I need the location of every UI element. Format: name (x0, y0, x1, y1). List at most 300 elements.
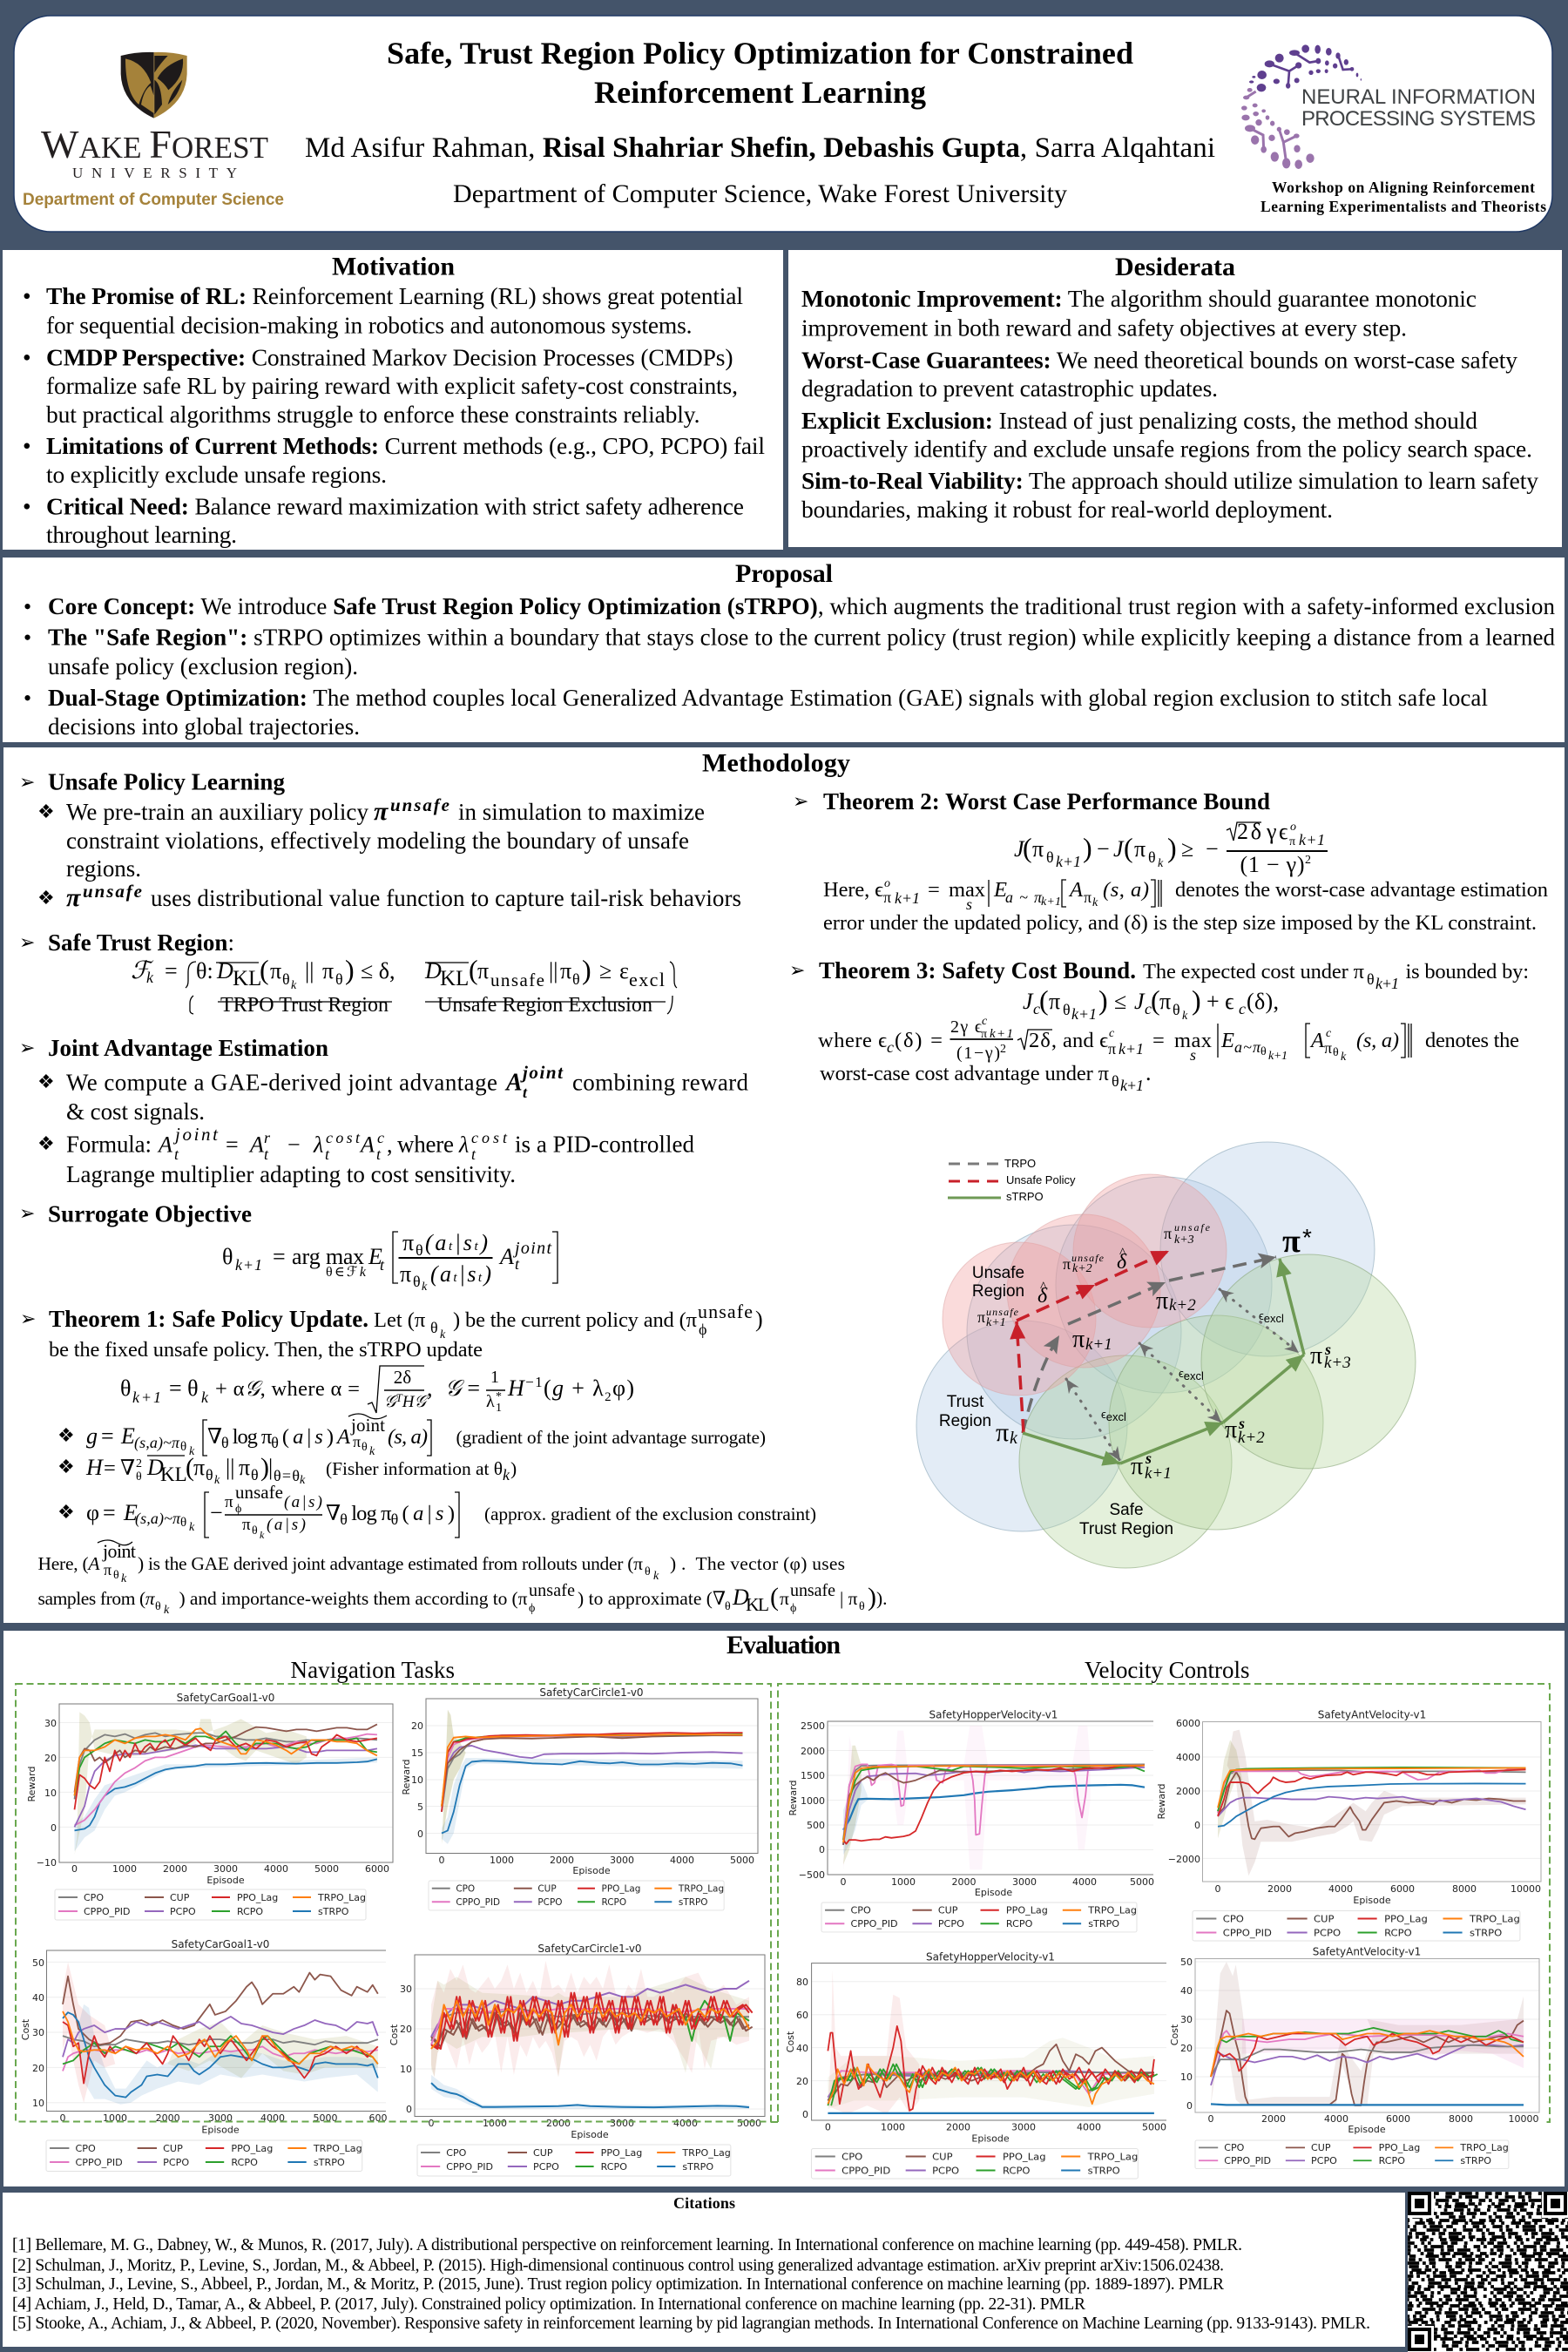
chart: SafetyAntVelocity reward: 10000 (1511, 1883, 1541, 1895)
formula: g: ❖ (57, 1425, 75, 1447)
legend: PPO_Lag (601, 2147, 642, 2159)
wordmark: WAKE FOREST (41, 122, 268, 166)
formula: feasible set: D (424, 958, 442, 983)
formula: cost bound: J (1023, 989, 1034, 1014)
text block: theorem 2 explanation: max (949, 878, 985, 902)
chart: SafetyHopperVelocity cost: 80 (796, 1977, 808, 1988)
chart: SafetyCarCircle1 reward: 0 (417, 1828, 423, 1840)
chart: SafetyAntVelocity reward: 2000 (1176, 1786, 1200, 1797)
section: theorem 3: θ (1367, 970, 1375, 988)
formula: phi: (s,a)~π (135, 1510, 181, 1528)
text block: theorem 3 explanation: a~π (1234, 1038, 1261, 1056)
text block: proposal bullets (24, 593, 1556, 740)
text block: theorem 1 explanation: k (121, 1572, 127, 1585)
section: theorem 3: The expected cost under π (1143, 960, 1364, 983)
section: joint advantage estimation: Formula: (66, 1131, 152, 1157)
formula: surrogate objective: E (368, 1244, 382, 1269)
logo: NeurIPS: PROCESSING SYSTEMS (1301, 107, 1536, 131)
formula: phi: ( (397, 1502, 414, 1525)
region labels: Region (939, 1412, 991, 1430)
reference list: [1] Bellemare, M. G., Dabney, W., & Munos, R. (2017, July). A distributional perspective on reinforcement learning. In International conference on machine learning (pp. 449-458). PMLR. (12, 2236, 1242, 2254)
formula: surrogate objective: π (402, 1230, 414, 1255)
legend: CPO (1223, 1914, 1244, 1924)
chart: SafetyHopperVelocity cost: 0 (802, 2109, 808, 2120)
text block: theorem 3 explanation: and ϵ (1063, 1029, 1108, 1052)
formula: feasible set: ( (260, 954, 269, 985)
formula: performance bound: θ (1148, 848, 1156, 866)
chart: SafetyAntVelocity reward: 4000 (1328, 1883, 1353, 1895)
formula: feasible set: ≤ δ, (361, 958, 395, 983)
chart: SafetyHopperVelocity cost: 4000 (1077, 2122, 1101, 2132)
formula: cost bound: J (1134, 989, 1146, 1014)
section: safe trust region: ➢ (19, 932, 35, 954)
chart: SafetyCarGoal1 cost: 600 (369, 2112, 387, 2124)
policy labels: k+1 (986, 1316, 1006, 1329)
text block: proposal bullets: Dual-Stage Optimization: The method couples local Generalized Advantage Estimation (GAE) signals with global region exclusion to stitch safe local (48, 685, 1488, 711)
formula: performance bound: k+1 (1056, 853, 1081, 870)
section: joint advantage estimation: r (264, 1129, 271, 1146)
chart: SafetyAntVelocity cost: Cost (1169, 2024, 1180, 2045)
text block: theorem 3 explanation: 2 (1000, 1043, 1006, 1056)
arrows: exclusion distance (1066, 1289, 1299, 1461)
chart: SafetyHopperVelocity reward: Episode (975, 1887, 1012, 1898)
text block: motivation bullets: but practical algorithms struggle to enforce these constraints reliably. (46, 401, 700, 428)
formula: surrogate objective: joint (512, 1239, 551, 1258)
formula: performance bound: o (1290, 821, 1296, 834)
legend: PCPO (932, 2166, 959, 2176)
logo: Wake Forest University (23, 52, 284, 209)
text block: theorem 1 explanation: ) and importance-weights them according to (π (179, 1588, 528, 1609)
formula: H: θ (206, 1466, 213, 1484)
text block: theorem 3 explanation: max (1174, 1029, 1212, 1052)
legend: sTRPO (1088, 2166, 1120, 2176)
formula: surrogate objective (222, 1230, 558, 1294)
text block: theorem 2 explanation: E (993, 878, 1007, 902)
text block: proposal bullets: unsafe policy (exclusion region). (48, 653, 358, 679)
heading: motivation: Motivation (332, 253, 455, 280)
section: unsafe policy learning: ➢ (19, 772, 35, 794)
formula: sTRPO update: g + λ (552, 1375, 604, 1401)
diagram legend (948, 1157, 1076, 1203)
formula: phi: k (189, 1521, 195, 1534)
formula: g: (s, a) (388, 1425, 428, 1449)
chart: SafetyAntVelocity reward: SafetyAntVelocity-v1 (1318, 1709, 1426, 1721)
text block: theorem 1 explanation: KL (746, 1594, 769, 1615)
formula: g: k (369, 1445, 375, 1458)
arrows: unsafe policy (1017, 1251, 1169, 1433)
text block: motivation bullets: to explicitly exclude unsafe regions. (46, 461, 387, 488)
policy labels: k+2 (1072, 1262, 1092, 1275)
text block: theorem 1 explanation: ) (868, 1583, 876, 1612)
legend: PPO_Lag (231, 2143, 273, 2154)
legend: CUP (1314, 1914, 1335, 1924)
formula: surrogate objective: t (380, 1256, 385, 1274)
legend: PCPO (1314, 1928, 1341, 1938)
formula: performance bound: J (1113, 836, 1125, 862)
legend: CPPO_PID (1223, 1928, 1272, 1938)
text block: theorem 3 explanation: (s, a) (1356, 1029, 1399, 1052)
chart: SafetyHopperVelocity reward: 5000 (1130, 1876, 1154, 1888)
chart: SafetyHopperVelocity cost: 1000 (881, 2122, 905, 2132)
formula: cost bound: π (1049, 989, 1060, 1014)
chart: SafetyAntVelocity cost: 8000 (1449, 2113, 1473, 2125)
text block: theorem 1 explanation: ) is the GAE derived joint advantage estimated from rollouts under (π (138, 1553, 643, 1574)
formula: H: k (300, 1474, 306, 1487)
chart: SafetyCarGoal1 cost: 10 (32, 2098, 44, 2109)
text block: theorem 2 explanation: o (884, 877, 890, 890)
text block: theorem 3 explanation: θ (1333, 1046, 1339, 1059)
chart: SafetyAntVelocity cost: SafetyAntVelocity-v1 (1313, 1946, 1421, 1958)
text block: theorem 3 explanation: E (1220, 1029, 1234, 1052)
green safe trust region circles (1019, 1254, 1416, 1568)
formula: feasible set: θ (282, 970, 290, 988)
region labels: Trust (947, 1393, 984, 1411)
legend: RCPO (602, 1897, 626, 1908)
policy labels: ^ (1119, 1246, 1126, 1260)
formula: sTRPO update: = θ (169, 1375, 199, 1401)
policy labels: π (1310, 1342, 1322, 1369)
section: joint advantage estimation: t (376, 1146, 382, 1163)
section: joint advantage estimation: t (264, 1146, 269, 1163)
formula: H: π (239, 1455, 250, 1480)
section: joint advantage estimation: ➢ (19, 1037, 35, 1059)
legend: CPPO_PID (850, 1918, 898, 1930)
legend: sTRPO (1460, 2155, 1491, 2166)
formula: g: g (86, 1423, 98, 1449)
chart: SafetyAntVelocity cost: Episode (1348, 2124, 1386, 2135)
chart: SafetyHopperVelocity reward (787, 1709, 1154, 1932)
policy labels: π (1164, 1225, 1172, 1242)
diagram: trust regions (916, 1142, 1416, 1568)
formula: phi: ❖ (57, 1502, 75, 1524)
legend: sTRPO (679, 1897, 707, 1908)
formula: feasible set: ε (619, 958, 629, 983)
formula: H: (Fisher information at θ (326, 1458, 503, 1479)
chart: SafetyCarGoal1 reward: 1000 (112, 1863, 137, 1875)
policy labels: k+2 (1238, 1429, 1265, 1447)
chart: SafetyAntVelocity reward: 6000 (1176, 1718, 1200, 1729)
formula: H: ∇ (120, 1456, 135, 1480)
section: theorem 1: ϕ (699, 1321, 706, 1338)
legend: RCPO (231, 2157, 258, 2168)
formula: performance bound: ( (1023, 832, 1032, 863)
formula: cost bound: c (1239, 1000, 1246, 1017)
section: surrogate objective: ➢ (19, 1203, 35, 1225)
formula: sTRPO update: H (507, 1375, 525, 1401)
formula: H: k (214, 1474, 220, 1487)
legend: CPPO_PID (446, 2161, 493, 2173)
text block: theorem 1 explanation: unsafe (529, 1581, 575, 1600)
formula: surrogate objective: = (273, 1244, 286, 1269)
legend: PCPO (170, 1906, 196, 1917)
formula: surrogate objective: k (422, 1281, 428, 1294)
chart: SafetyCarCircle1 reward: 20 (411, 1720, 423, 1732)
title: Reinforcement Learning (594, 75, 926, 110)
text block: theorem 3 explanation: where ϵ (818, 1029, 887, 1052)
text block: desiderata items: improvement in both reward and safety objectives at every step. (801, 314, 1407, 341)
formula: g: π (353, 1433, 361, 1450)
text block: motivation bullets: Limitations of Current Methods: Current methods (e.g., CPO, PCPO) fail (46, 432, 765, 459)
chart: SafetyAntVelocity reward: Episode (1353, 1895, 1391, 1906)
section: theorem 3: is bounded by: (1406, 960, 1529, 983)
section: joint advantage estimation: is a PID-controlled (515, 1131, 695, 1157)
formula: g: ∇ (207, 1425, 222, 1449)
chart: SafetyAntVelocity reward: Reward (1156, 1784, 1167, 1819)
chart: SafetyHopperVelocity reward: 1000 (891, 1876, 916, 1888)
legend: RCPO (601, 2161, 627, 2173)
formula: g: = (101, 1423, 114, 1449)
formula: g (57, 1414, 766, 1458)
legend: CPPO_PID (456, 1897, 500, 1908)
text block: motivation bullets: • (23, 343, 31, 371)
formula: g: (s,a)~π (134, 1434, 180, 1452)
formula: H: | (268, 1455, 273, 1480)
policy labels: k+1 (1085, 1335, 1112, 1354)
legend: PPO_Lag (1003, 2152, 1046, 2162)
region labels: Region (972, 1282, 1024, 1301)
formula: cost bound: ≤ (1114, 989, 1126, 1014)
panel: methodology (3, 747, 1565, 1623)
chart: SafetyHopperVelocity reward: 4000 (1072, 1876, 1097, 1888)
text block: theorem 3 explanation: 2δ, (1029, 1029, 1057, 1052)
text block: desiderata items: proactively identify and exclude unsafe regions from the policy search space. (801, 436, 1532, 462)
text block: proposal bullets: • (24, 625, 31, 650)
text block: motivation bullets: for sequential decision-making in robotics and autonomous systems. (46, 312, 692, 338)
legend: RCPO (1384, 1928, 1412, 1938)
formula: cost bound: π (1159, 989, 1171, 1014)
chart: SafetyHopperVelocity cost: SafetyHopperVelocity-v1 (926, 1951, 1055, 1963)
section: unsafe policy learning: ❖ (37, 801, 55, 823)
legend: TRPO_Lag (1087, 2152, 1138, 2162)
section: safe trust region: Safe Trust Region: (48, 929, 234, 956)
chart: SafetyCarCircle1 cost: 0 (429, 2118, 434, 2129)
formula: phi: k (260, 1529, 265, 1541)
chart: SafetyCarCircle1 reward: Reward (401, 1760, 412, 1794)
wordmark: university: UNIVERSITY (72, 165, 237, 181)
legend: CUP (537, 1884, 557, 1895)
text block: theorem 3 explanation: k (1341, 1051, 1347, 1064)
formula: phi: unsafe (235, 1482, 283, 1503)
section: joint advantage estimation: ❖ (37, 1071, 55, 1093)
formula: H: π (193, 1455, 205, 1480)
section: joint advantage estimation: A (157, 1132, 172, 1157)
formula: performance bound: ) (1083, 832, 1092, 863)
chart: SafetyHopperVelocity cost: Episode (971, 2132, 1010, 2145)
formula: H: ) (510, 1458, 517, 1479)
heading: velocity controls: Velocity Controls (1085, 1657, 1249, 1683)
policy labels: excl (1264, 1312, 1284, 1325)
text block: theorem 2 explanation: A (1068, 878, 1084, 902)
text block: theorem 3 explanation: c (1109, 1027, 1115, 1040)
chart: SafetyHopperVelocity reward: 0 (840, 1876, 847, 1888)
title (387, 36, 1133, 110)
legend: CUP (1311, 2143, 1331, 2153)
chart: SafetyCarGoal1 reward (26, 1692, 393, 1920)
formula: surrogate objective: θ (416, 1241, 423, 1259)
section: theorem 1: ) be the current policy and (π (453, 1308, 697, 1332)
chart: SafetyHopperVelocity cost: 60 (796, 2010, 808, 2021)
chart: SafetyCarGoal1 reward: 4000 (264, 1863, 288, 1875)
formula: phi: − (210, 1500, 223, 1525)
chart: SafetyHopperVelocity reward: 0 (819, 1844, 825, 1855)
chart: SafetyCarGoal1 reward: −10 (37, 1857, 57, 1869)
text block: theorem 1 explanation: θ (155, 1600, 161, 1613)
legend: CPO (456, 1884, 475, 1895)
formula: sTRPO update: k (201, 1389, 209, 1406)
legend: RCPO (237, 1906, 263, 1917)
chart: SafetyHopperVelocity reward: 3000 (1012, 1876, 1037, 1888)
legend: PCPO (533, 2161, 559, 2173)
chart: SafetyCarCircle1 cost: 2000 (546, 2118, 571, 2129)
formula: sTRPO update: ( (544, 1375, 551, 1401)
formula: performance bound: ≥ (1181, 836, 1193, 862)
chart: SafetyAntVelocity cost: 30 (1180, 2014, 1193, 2025)
formula: sTRPO update: 1 (490, 1368, 499, 1387)
legend (812, 2148, 1138, 2179)
policy labels: s (1324, 1341, 1331, 1358)
text block: theorem 2 explanation: denotes the worst-case advantage estimation (1175, 878, 1548, 902)
chart: SafetyCarCircle1 cost: 3000 (610, 2118, 634, 2129)
text block: theorem 3 explanation: worst-case cost advantage under π (820, 1062, 1109, 1085)
policy labels: π (1131, 1453, 1143, 1480)
formula: sTRPO update: 𝒢 (384, 1393, 396, 1411)
formula: cost bound: ) (1098, 984, 1108, 1016)
formula: feasible set: ) (582, 954, 591, 985)
legend: PPO_Lag (1379, 2143, 1420, 2153)
formula: sTRPO update: 2δ (394, 1367, 411, 1388)
section: theorem 3: Theorem 3: Safety Cost Bound. (819, 957, 1136, 983)
text block: theorem 1 explanation: D (732, 1585, 749, 1610)
legend (1193, 1911, 1520, 1941)
chart: SafetyHopperVelocity cost: 20 (796, 2076, 808, 2087)
formula: surrogate objective: θ∈ℱk (326, 1265, 367, 1280)
section: theorem 1 (20, 1301, 888, 1617)
text block: desiderata items: Sim-to-Real Viability: The approach should utilize simulation to learn safety (801, 467, 1538, 494)
chart: SafetyCarCircle1 cost: 10 (400, 2064, 412, 2075)
chart: SafetyCarCircle1 cost: 20 (400, 2024, 412, 2035)
chart: SafetyCarCircle1 reward: 5 (417, 1801, 423, 1813)
region labels: Unsafe (972, 1264, 1024, 1282)
text block: theorem 3 explanation: k+1 (1119, 1040, 1144, 1058)
chart: SafetyAntVelocity reward: 2000 (1267, 1883, 1292, 1895)
formula: sTRPO update: 1 (496, 1402, 502, 1415)
chart: SafetyHopperVelocity cost: Cost (785, 2031, 796, 2052)
section: theorem 3: k+1 (1375, 975, 1399, 992)
text block: theorem 3 explanation: 2γ ϵ (950, 1017, 982, 1037)
chart: SafetyCarGoal1 reward: 20 (44, 1753, 57, 1764)
text block: theorem 3 explanation: denotes the (1425, 1029, 1519, 1052)
section: joint advantage estimation: t (471, 1146, 476, 1163)
policy labels: excl (1184, 1369, 1204, 1382)
workshop name (1260, 179, 1546, 215)
formula: H: = (104, 1456, 116, 1480)
chart: SafetyAntVelocity cost: 10000 (1509, 2113, 1538, 2125)
text block: theorem 2 explanation: Here, ϵ (823, 878, 883, 902)
chart: SafetyHopperVelocity cost: 40 (796, 2043, 808, 2054)
text block: theorem 2 explanation: error under the updated policy, and (δ) is the step size imposed by the KL constraint. (823, 911, 1537, 935)
panel: evaluation (3, 1631, 1565, 2186)
formula: feasible set: k (146, 969, 154, 986)
formula: phi: a | s ) (413, 1502, 455, 1525)
chart: SafetyCarCircle1 reward: 10 (411, 1774, 423, 1786)
chart: SafetyCarGoal1 reward: 3000 (213, 1863, 238, 1875)
formula: sTRPO update: H𝒢 (402, 1393, 429, 1411)
legend (46, 2140, 362, 2171)
chart: SafetyCarCircle1 cost: 4000 (673, 2118, 698, 2129)
formula: H: k (503, 1466, 510, 1484)
legend: sTRPO (314, 2157, 345, 2168)
section: joint advantage estimation: A (359, 1132, 375, 1157)
text block: theorem 1 explanation: | π (840, 1588, 858, 1609)
formula: sTRPO update: T (396, 1391, 403, 1404)
legend: CPO (841, 2152, 862, 2162)
text block: theorem 3 explanation: θ (1112, 1072, 1119, 1090)
region labels (939, 1264, 1173, 1538)
section: theorem 1: Let (π (374, 1308, 425, 1332)
legend: RCPO (1003, 2166, 1031, 2176)
region labels: Safe (1109, 1501, 1144, 1519)
formula: surrogate objective: t (515, 1255, 520, 1273)
chart: SafetyAntVelocity reward: 0 (1194, 1820, 1200, 1831)
policy labels: δ (1037, 1285, 1048, 1308)
text block: desiderata items: degradation to prevent catastrophic updates. (801, 375, 1218, 402)
text block: theorem 1 explanation: θ (859, 1600, 865, 1613)
text block: theorem 1 explanation: ϕ (529, 1602, 535, 1615)
legend: CUP (163, 2143, 183, 2154)
diagram legend: Unsafe Policy (1006, 1173, 1076, 1186)
formula: feasible set: ( (469, 954, 478, 985)
legend: CPPO_PID (1224, 2155, 1271, 2166)
formula: feasible set: D (216, 958, 233, 983)
chart: SafetyHopperVelocity cost (785, 1951, 1166, 2179)
chart: SafetyHopperVelocity reward: Reward (787, 1781, 799, 1815)
formula: surrogate objective: k+1 (235, 1256, 262, 1274)
formula: sTRPO update: 2 (605, 1390, 612, 1404)
formula: surrogate objective: arg (292, 1244, 321, 1269)
logo: NeurIPS: NEURAL INFORMATION (1301, 85, 1536, 109)
chart: SafetyCarGoal1 cost: 4000 (260, 2112, 285, 2124)
legend (429, 1881, 724, 1910)
chart: SafetyHopperVelocity reward: 2000 (951, 1876, 976, 1888)
formula: phi: (a|s) (267, 1516, 306, 1534)
text block: theorem 1 explanation: θ (113, 1569, 119, 1582)
chart: SafetyAntVelocity cost: 20 (1180, 2043, 1193, 2054)
section: joint advantage estimation: t (325, 1146, 330, 1163)
formula: surrogate objective: θ (413, 1273, 421, 1290)
formula: performance bound: ) (1167, 832, 1177, 863)
policy labels: unsafe (986, 1306, 1019, 1318)
section: joint advantage estimation: t (174, 1146, 179, 1163)
text block: theorem 1 explanation: π (780, 1588, 789, 1609)
policy labels: unsafe (1174, 1221, 1211, 1233)
chart: SafetyHopperVelocity reward: −500 (799, 1869, 825, 1881)
formula: feasible set (131, 954, 677, 1017)
text block: theorem 3 explanation: c (887, 1038, 894, 1056)
text block: theorem 1 explanation: samples from (π (38, 1588, 156, 1609)
text block: theorem 2 explanation: (s, a) (1103, 878, 1149, 902)
text block: theorem 2 explanation: s (966, 896, 972, 913)
legend: TRPO_Lag (317, 1892, 366, 1903)
policy labels: π (1072, 1326, 1085, 1353)
text block: theorem 3 explanation: A (1309, 1029, 1325, 1052)
panel: citations (3, 2193, 1405, 2347)
formula: feasible set: π (477, 958, 489, 983)
legend: PPO_Lag (237, 1892, 278, 1903)
formula: performance bound: π (1032, 836, 1044, 862)
formula: performance bound: 2 (1305, 854, 1311, 867)
formula: feasible set: π (270, 958, 281, 983)
section: joint advantage estimation: joint (172, 1124, 219, 1145)
